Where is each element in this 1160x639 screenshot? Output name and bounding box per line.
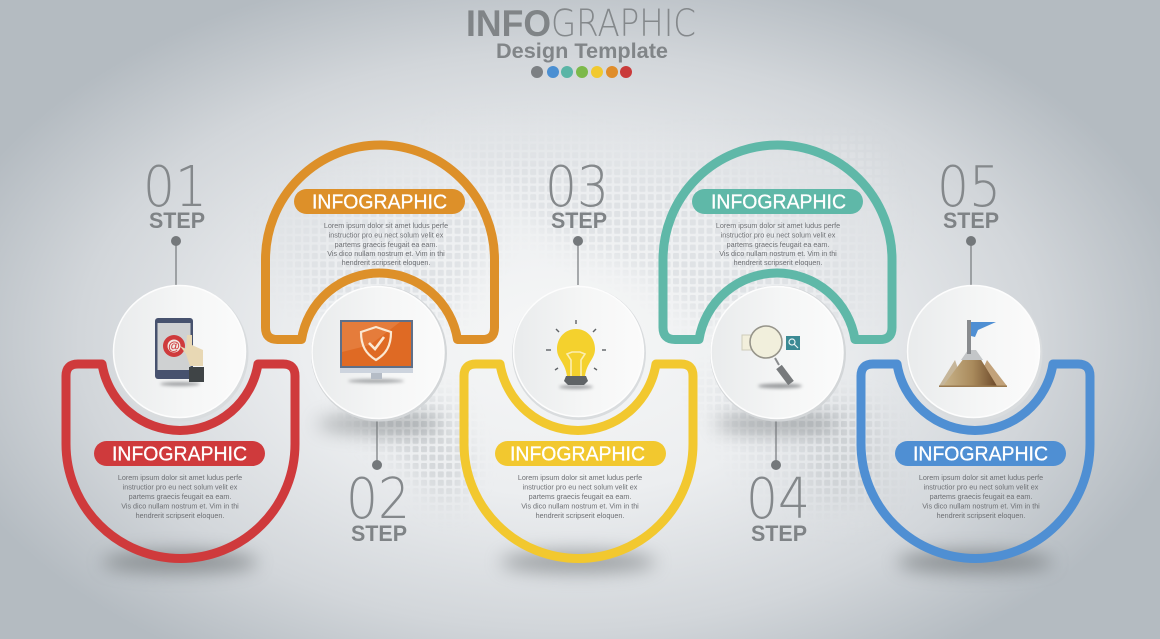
step 5 label and pin: STEP bbox=[943, 208, 999, 233]
step 3 label and pin: 03 bbox=[545, 155, 609, 220]
red body text: hendrerit scripserit eloquen. bbox=[136, 511, 224, 520]
step 1 label and pin: STEP bbox=[149, 208, 205, 233]
orange outline bbox=[266, 145, 494, 340]
icon: monitor with shield bbox=[340, 320, 413, 383]
teal body text: instructior pro eu nect solum velit ex bbox=[721, 230, 836, 240]
red outline bbox=[66, 364, 295, 558]
yellow outline bbox=[464, 364, 693, 558]
disc: step 1 bbox=[112, 286, 248, 422]
step 2 label and pin: 02 bbox=[346, 467, 410, 532]
red body text bbox=[118, 473, 242, 520]
teal body text: partems graecis feugait ea eam. bbox=[727, 240, 829, 249]
title bbox=[466, 2, 696, 63]
teal body text: Vis dico nullam nostrum et. Vim in thi bbox=[719, 249, 837, 258]
world map dot pattern bbox=[304, 161, 885, 502]
orange body text: Lorem ipsum dolor sit amet ludus perfe bbox=[324, 221, 448, 230]
red body text: Lorem ipsum dolor sit amet ludus perfe bbox=[118, 473, 242, 482]
teal outline bbox=[663, 145, 892, 340]
title: INFO bbox=[466, 3, 551, 44]
panel: step 4 teal bbox=[663, 145, 892, 340]
shadow: under step 1 panel bbox=[102, 551, 258, 573]
yellow heading pill: INFOGRAPHIC bbox=[510, 444, 645, 466]
blue body text: instructior pro eu nect solum velit ex bbox=[924, 482, 1039, 492]
blue body text: partems graecis feugait ea eam. bbox=[930, 492, 1032, 501]
icon: magnifier and search bar bbox=[742, 326, 802, 388]
yellow body text: hendrerit scripserit eloquen. bbox=[536, 511, 624, 520]
disc: step 3 bbox=[512, 286, 646, 420]
step 5 label and pin: 05 bbox=[937, 155, 1001, 220]
teal body text: Lorem ipsum dolor sit amet ludus perfe bbox=[716, 221, 840, 230]
yellow body text bbox=[518, 473, 642, 520]
red body text: Vis dico nullam nostrum et. Vim in thi bbox=[121, 502, 239, 510]
orange heading pill: INFOGRAPHIC bbox=[312, 192, 447, 214]
title: Design Template bbox=[496, 40, 668, 63]
step 2 label and pin: STEP bbox=[351, 521, 407, 546]
step 4 label and pin bbox=[746, 420, 810, 546]
icon: tablet with at sign and hand: @ bbox=[168, 339, 180, 353]
icon: tablet with at sign and hand bbox=[155, 318, 204, 386]
icon: light bulb bbox=[546, 320, 606, 389]
blue body text bbox=[919, 473, 1043, 520]
shadow: under step 5 panel bbox=[897, 551, 1053, 573]
shadow: under step 4 disc bbox=[715, 414, 839, 434]
yellow body text: Vis dico nullam nostrum et. Vim in thi bbox=[521, 502, 639, 510]
teal body text bbox=[716, 221, 840, 267]
disc: step 2 bbox=[311, 286, 447, 422]
red body text: partems graecis feugait ea eam. bbox=[129, 492, 231, 501]
orange body text bbox=[324, 221, 448, 267]
panel: step 3 yellow bbox=[464, 364, 693, 558]
step 3 label and pin bbox=[545, 155, 609, 285]
disc: step 5 bbox=[906, 286, 1042, 422]
blue heading pill: INFOGRAPHIC bbox=[913, 444, 1048, 466]
yellow body text: partems graecis feugait ea eam. bbox=[529, 492, 631, 501]
blue body text: Lorem ipsum dolor sit amet ludus perfe bbox=[919, 473, 1043, 482]
step 4 label and pin: STEP bbox=[751, 521, 807, 546]
yellow body text: instructior pro eu nect solum velit ex bbox=[523, 482, 638, 492]
shadow: under step 2 disc bbox=[317, 414, 441, 434]
colour dots row bbox=[531, 66, 632, 78]
blue body text: Vis dico nullam nostrum et. Vim in thi bbox=[922, 502, 1040, 510]
step 1 label and pin bbox=[143, 155, 207, 285]
red body text: instructior pro eu nect solum velit ex bbox=[123, 482, 238, 492]
teal body text: hendrerit scripserit eloquen. bbox=[734, 258, 822, 267]
blue body text: hendrerit scripserit eloquen. bbox=[937, 511, 1025, 520]
step 4 label and pin: 04 bbox=[746, 467, 810, 532]
blue outline bbox=[861, 364, 1090, 558]
orange body text: partems graecis feugait ea eam. bbox=[335, 240, 437, 249]
panel: step 5 blue bbox=[861, 364, 1090, 558]
step 2 label and pin bbox=[346, 420, 410, 546]
icon: mountain with flag bbox=[939, 320, 1007, 387]
panel: step 2 orange bbox=[266, 145, 494, 340]
teal heading pill: INFOGRAPHIC bbox=[711, 192, 846, 214]
orange body text: instructior pro eu nect solum velit ex bbox=[329, 230, 444, 240]
yellow body text: Lorem ipsum dolor sit amet ludus perfe bbox=[518, 473, 642, 482]
red heading pill: INFOGRAPHIC bbox=[112, 444, 247, 466]
orange body text: Vis dico nullam nostrum et. Vim in thi bbox=[327, 249, 445, 258]
disc: step 4 bbox=[710, 286, 846, 422]
step 1 label and pin: 01 bbox=[143, 155, 207, 220]
shadow: under step 3 panel bbox=[500, 551, 656, 573]
orange body text: hendrerit scripserit eloquen. bbox=[342, 258, 430, 267]
step 5 label and pin bbox=[937, 155, 1001, 285]
step 3 label and pin: STEP bbox=[551, 208, 607, 233]
title: GRAPHIC bbox=[551, 2, 696, 45]
panel: step 1 red bbox=[66, 364, 295, 558]
